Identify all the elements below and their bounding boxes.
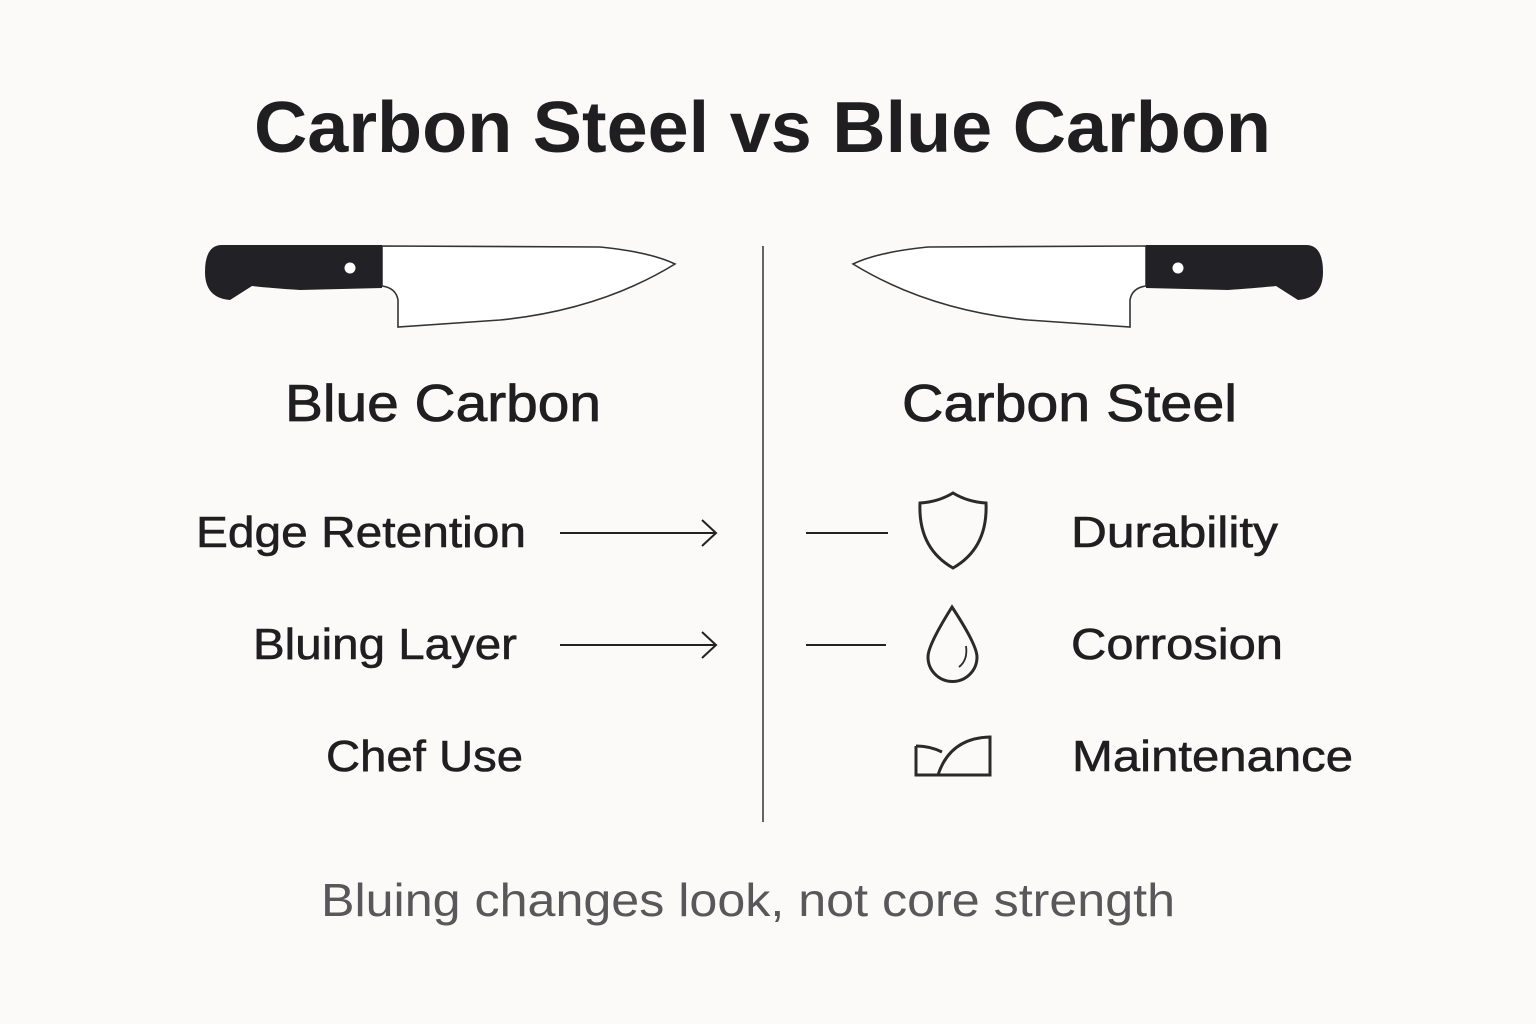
label: Durability: Durability xyxy=(1071,508,1278,557)
connector line 2 xyxy=(806,644,886,646)
heading: Blue Carbon: Blue Carbon xyxy=(285,375,601,433)
icon: shield xyxy=(920,493,986,568)
icon: maintenance xyxy=(916,737,990,775)
connector line 1 xyxy=(806,532,888,534)
heading: Carbon Steel: Carbon Steel xyxy=(902,375,1237,433)
label: Edge Retention: Edge Retention xyxy=(196,508,526,557)
label: Corrosion: Corrosion xyxy=(1071,620,1283,669)
arrow 1 xyxy=(560,520,716,546)
arrow 2 xyxy=(560,632,716,658)
icon: drop xyxy=(928,607,977,682)
footer note: Bluing changes look, not core strength xyxy=(321,874,1175,926)
label: Maintenance: Maintenance xyxy=(1072,732,1353,781)
title: Carbon Steel vs Blue Carbon xyxy=(254,88,1271,168)
label: Bluing Layer: Bluing Layer xyxy=(253,620,517,669)
icon: right knife xyxy=(853,245,1323,327)
icon: left knife xyxy=(205,245,675,327)
label: Chef Use: Chef Use xyxy=(326,732,523,781)
